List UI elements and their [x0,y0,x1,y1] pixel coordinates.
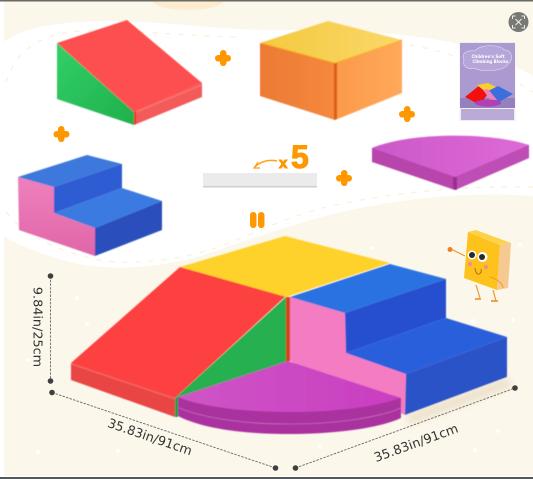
purple cushion top [178,361,401,412]
purple cushion side [178,397,401,434]
arrow pointing to strips [254,160,277,168]
blue front [405,337,507,415]
expand button icon [508,12,528,32]
equals icon rotated [250,212,264,228]
mascot arm and pointing hand [451,249,465,256]
blue stair top [290,264,446,313]
plus icon 1 [215,50,231,66]
product: pink and blue stairs (left) [18,155,162,256]
plus icon 2 [54,126,70,142]
blue riser [345,279,446,353]
quantity label: times five: x [279,155,288,172]
dimension: left width: 35.83in/91cm [105,416,194,459]
quantity label: times five [279,139,309,175]
mascot smile [475,268,481,274]
product: yellow and orange cube (top centre) [260,21,402,120]
large assembled set [71,236,513,434]
red ramp side [71,363,175,417]
orange strip [286,297,290,362]
cushion seam [179,408,401,424]
product: wedge ramp (top left) [57,20,202,125]
mascot body [464,232,500,290]
quantity label: times five: 5 [291,139,309,175]
instruction manual thumbnail: Climbing Blocks [472,59,509,64]
instruction manual thumbnail: Children's Soft [472,54,505,59]
dimension: right width [293,385,518,471]
pink stair side [290,297,406,415]
red ramp top [71,267,286,398]
mascot eyes [468,250,476,260]
dimension: right width: 35.83in/91cm [372,422,460,466]
dimension: height [30,273,53,384]
plus icon 3 [399,106,415,122]
product: purple quarter circle cushion (right) [372,136,529,190]
ground shadow [405,378,513,424]
product: five white connector strips [203,173,317,188]
yellow top [180,236,390,297]
instruction manual thumbnail [460,42,516,121]
plus icon 4 [336,170,352,186]
green ramp side [175,297,288,417]
blue lower tread [346,318,507,374]
dimension: left width [49,390,278,471]
dashed decorative trail [5,31,533,262]
dimension: height: 9.84in/25cm [30,287,44,367]
mascot: yellow book character [448,230,511,301]
mascot legs [476,285,496,301]
